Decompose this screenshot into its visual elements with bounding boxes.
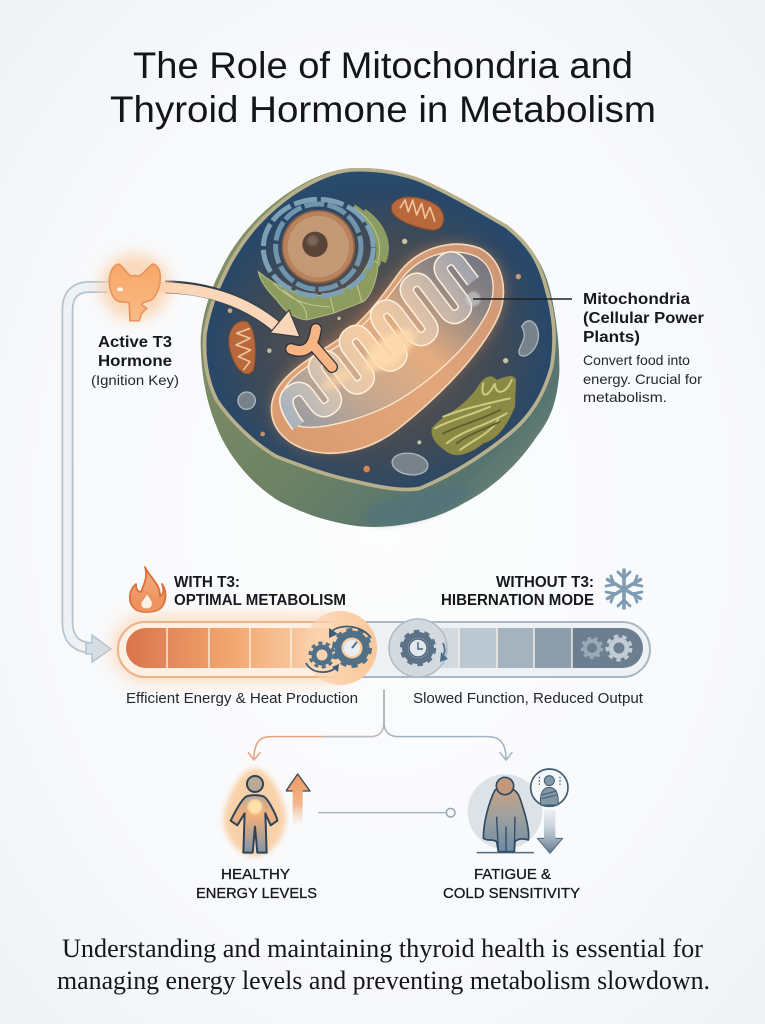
bar glow: [112, 616, 362, 682]
nucleus and endoplasmic reticulum: [258, 199, 386, 320]
title: Thyroid Hormone in Metabolism: [110, 89, 656, 130]
illustration: cell: [201, 168, 559, 527]
arrow: T3 hormone into mitochondrion: [150, 287, 300, 337]
icon: slowed clock gear: [402, 632, 448, 664]
label: mitochondria: Mitochondria: [583, 291, 690, 308]
heading: without T3: HIBERNATION MODE: [441, 592, 594, 609]
return pipe from thyroid to bar: [68, 287, 111, 662]
arrow: down: [537, 810, 563, 853]
leader line: [473, 298, 572, 300]
leader dot end: [466, 292, 481, 306]
caption: slowed: Slowed Function, Reduced Output: [413, 690, 644, 707]
label: active T3 hormone: Active T3: [98, 334, 172, 351]
icon: snowflake: [606, 570, 642, 608]
label: active T3 hormone: Hormone: [98, 353, 172, 370]
caption: efficient: Efficient Energy & Heat Production: [126, 690, 358, 707]
label: active T3 hormone: (Ignition Key): [91, 372, 179, 388]
label: fatigue and cold sensitivity: [443, 866, 580, 902]
branching connector: [248, 690, 512, 760]
icon: fatigued person with blanket: [468, 774, 542, 853]
heading: without T3: WITHOUT T3:: [496, 574, 594, 591]
conclusion text: Understanding and maintaining thyroid health is essential for: [62, 934, 703, 963]
dots: [228, 239, 521, 472]
golgi: [431, 376, 516, 455]
small mitochondrion top: [391, 197, 444, 230]
cytoplasm with rim: [205, 170, 554, 489]
label: mitochondria: [583, 291, 704, 405]
small mitochondrion left: [229, 321, 255, 374]
heading: with T3: [174, 574, 346, 609]
label: mitochondria: energy. Crucial for: [583, 371, 702, 387]
cell outer wall: [201, 168, 559, 527]
label: healthy energy levels: ENERGY LEVELS: [196, 885, 317, 902]
connector line with node: [318, 808, 455, 817]
icon: cold person badge: [531, 769, 568, 806]
orange gear disc: [303, 611, 377, 685]
label: fatigue and cold sensitivity: COLD SENSITIVITY: [443, 885, 580, 902]
conclusion text: managing energy levels and preventing metabolism slowdown.: [57, 966, 710, 995]
label: fatigue and cold sensitivity: FATIGUE &: [474, 866, 551, 883]
conclusion text: [57, 934, 710, 995]
label: mitochondria: Plants): [583, 329, 640, 346]
icon: thyroid gland: [100, 253, 170, 321]
orange segment fill: [126, 628, 340, 668]
icon: ignition key receptor: [291, 329, 332, 367]
title: [110, 45, 656, 130]
heading: without T3: [441, 574, 594, 609]
label: mitochondria: metabolism.: [583, 389, 667, 405]
grey gear disc: [389, 619, 447, 677]
bar track: [118, 622, 650, 677]
label: mitochondria: (Cellular Power: [583, 310, 704, 327]
main mitochondrion: [270, 244, 503, 453]
title: The Role of Mitochondria and: [133, 45, 633, 86]
inner chamber: [281, 252, 493, 427]
label: mitochondria: Convert food into: [583, 352, 690, 368]
energy glow: [358, 321, 422, 379]
icon: flame: [130, 567, 165, 612]
gauge bar: [112, 611, 650, 685]
icon: active gears: [306, 626, 371, 672]
heading: with T3: WITH T3:: [174, 574, 240, 591]
segment ticks: [167, 628, 572, 668]
heading: with T3: OPTIMAL METABOLISM: [174, 592, 346, 609]
vesicles: [238, 321, 538, 477]
label: healthy energy levels: HEALTHY: [221, 866, 290, 883]
icon: energized person: [224, 768, 286, 857]
grey segment fill: [440, 628, 643, 668]
label: active T3 hormone: [91, 334, 179, 388]
lower icons group: [224, 690, 568, 857]
label: healthy energy levels: [196, 866, 317, 902]
icon: idle gears: [582, 636, 631, 660]
mitochondrion glow: [272, 245, 504, 450]
arrow: up: [286, 774, 310, 825]
cristae folds: [270, 252, 484, 433]
